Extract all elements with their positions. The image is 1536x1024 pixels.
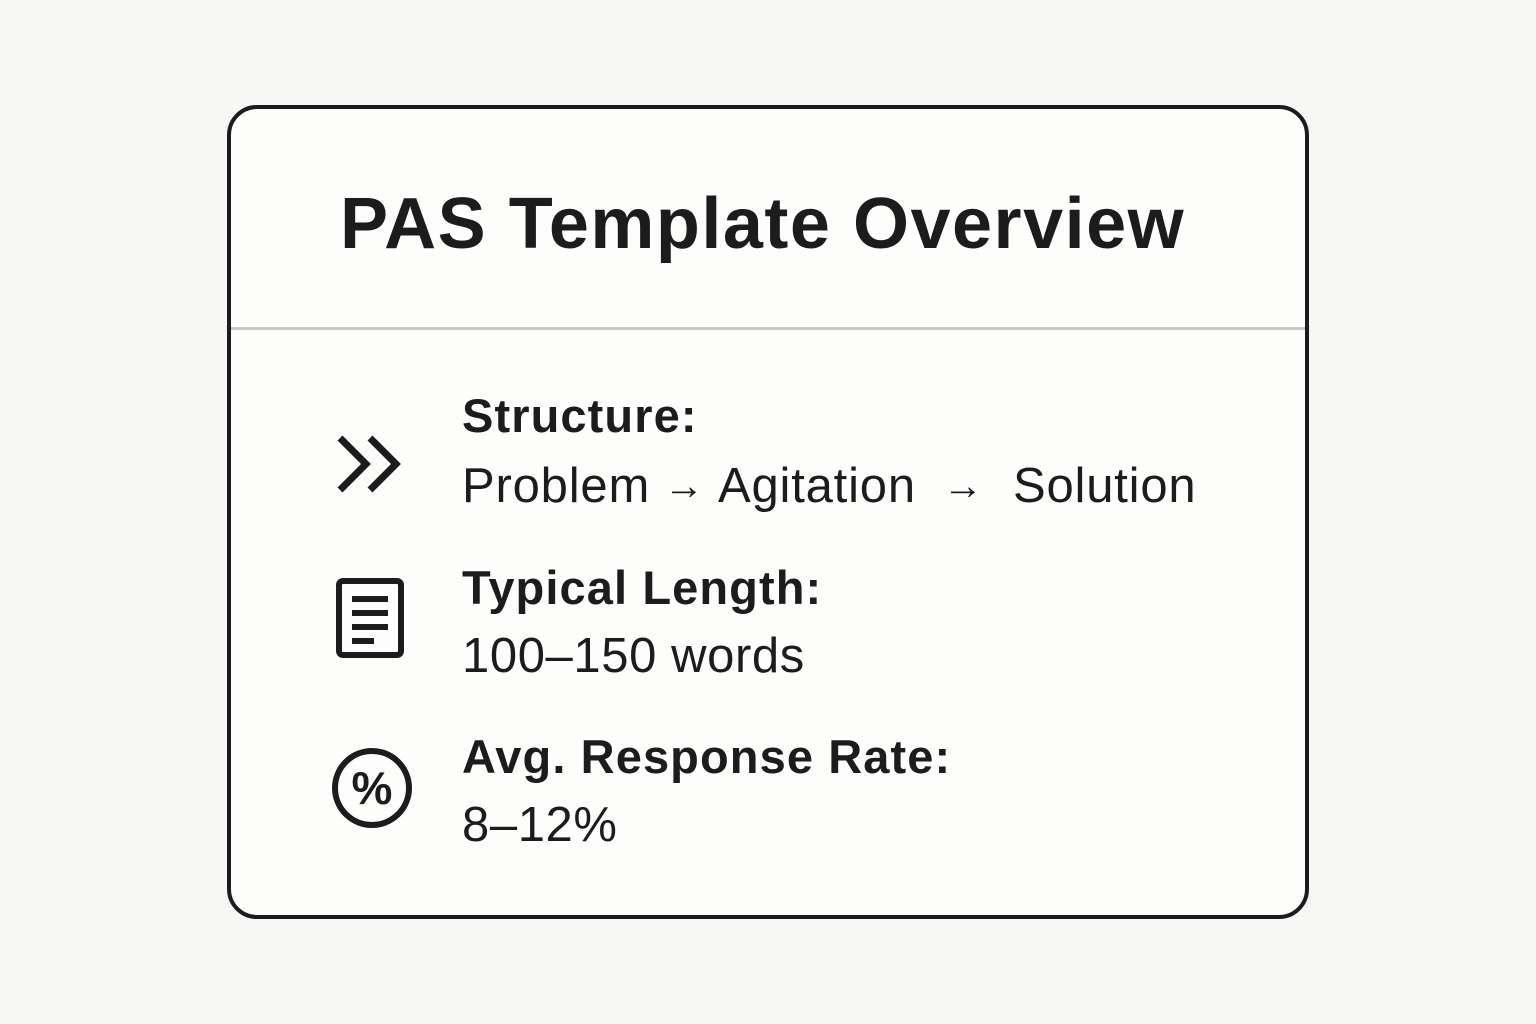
structure value: → (943, 464, 983, 508)
typical length value: 100–150 words (462, 629, 805, 683)
structure value: Problem (462, 459, 650, 513)
icon: double chevron (338, 436, 401, 492)
icon: percent circle: % (352, 762, 392, 814)
card panel (227, 105, 1309, 919)
structure value (462, 459, 1196, 513)
structure label: Structure: (462, 389, 698, 442)
icon: document (336, 578, 404, 658)
typical length label: Typical Length: (462, 561, 822, 614)
structure value: Agitation (718, 459, 916, 513)
icon: percent circle (332, 748, 412, 828)
response rate label: Avg. Response Rate: (462, 730, 951, 783)
structure value: Solution (1013, 459, 1196, 513)
title: PAS Template Overview (340, 184, 1185, 264)
structure value: → (664, 464, 704, 508)
response rate value: 8–12% (462, 798, 618, 852)
